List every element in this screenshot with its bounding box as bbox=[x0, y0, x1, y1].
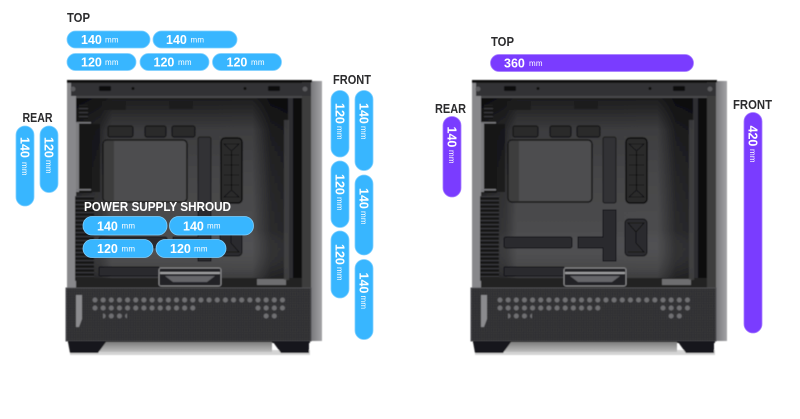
heading: rear: REAR bbox=[435, 102, 466, 116]
front fan pills: 120 bbox=[332, 103, 346, 124]
top fan pills: mm bbox=[105, 58, 119, 67]
heading: power supply shroud: POWER SUPPLY SHROUD bbox=[84, 200, 231, 214]
panel: right radiator support bbox=[435, 35, 772, 333]
front fan pills: mm bbox=[359, 126, 368, 140]
top fan pills: mm bbox=[105, 36, 119, 44]
shroud fan pills: mm bbox=[207, 222, 221, 230]
front fan pills: 140 bbox=[356, 188, 370, 209]
top fan pills: mm bbox=[178, 58, 192, 67]
top fan pills: 120 bbox=[154, 56, 174, 70]
front fan pills: 120 bbox=[332, 244, 346, 265]
front fan pills: mm bbox=[335, 126, 344, 140]
front fan pills: mm bbox=[359, 211, 368, 225]
shroud fan pills: mm bbox=[194, 244, 208, 254]
heading: top: TOP bbox=[67, 11, 90, 25]
front fan pills: mm bbox=[335, 267, 344, 281]
rear fan pills bbox=[16, 126, 58, 206]
top fan pills: 140 bbox=[81, 33, 102, 47]
panel: left fan support bbox=[16, 11, 373, 340]
front fan pills: 140 bbox=[356, 272, 370, 293]
rear fan pills: 140 bbox=[18, 137, 32, 158]
heading: rear: REAR bbox=[22, 111, 52, 125]
heading: top: TOP bbox=[491, 35, 514, 49]
front fan pills: mm bbox=[359, 296, 368, 309]
top radiator pill bbox=[490, 54, 694, 72]
top fan pills: 120 bbox=[226, 56, 247, 70]
rear radiator pill: mm bbox=[447, 150, 456, 164]
top fan pills: 120 bbox=[81, 56, 102, 70]
case illustration: right bbox=[471, 80, 727, 355]
shroud fan pills: 120 bbox=[170, 242, 191, 256]
top fan pills: mm bbox=[251, 58, 265, 67]
shroud fan pills: 140 bbox=[97, 220, 118, 234]
front fan pills bbox=[331, 90, 373, 340]
shroud fan pills: 120 bbox=[97, 242, 118, 256]
rear radiator pill bbox=[443, 116, 461, 197]
shroud fan pills: 140 bbox=[183, 220, 204, 234]
heading: front: FRONT bbox=[733, 98, 772, 112]
front radiator pill bbox=[744, 112, 762, 333]
rear radiator pill: 140 bbox=[444, 126, 458, 147]
shroud fan pills: mm bbox=[122, 222, 135, 230]
front radiator pill: 420 bbox=[746, 126, 760, 146]
front fan pills: mm bbox=[335, 197, 344, 211]
heading: front: FRONT bbox=[333, 73, 371, 87]
front fan pills: 120 bbox=[332, 174, 346, 195]
top fan pills bbox=[67, 31, 282, 70]
case illustration: left bbox=[66, 80, 322, 355]
rear fan pills: mm bbox=[44, 160, 53, 174]
shroud fan pills: mm bbox=[122, 244, 135, 254]
top radiator pill: mm bbox=[529, 59, 543, 68]
front radiator pill: mm bbox=[748, 149, 757, 163]
rear fan pills: mm bbox=[20, 162, 29, 176]
rear fan pills: 120 bbox=[42, 137, 56, 158]
front fan pills: 140 bbox=[356, 103, 370, 124]
top radiator pill: 360 bbox=[504, 56, 525, 70]
top fan pills: 140 bbox=[166, 33, 187, 47]
top fan pills: mm bbox=[190, 36, 204, 44]
shroud fan pills bbox=[83, 216, 254, 258]
